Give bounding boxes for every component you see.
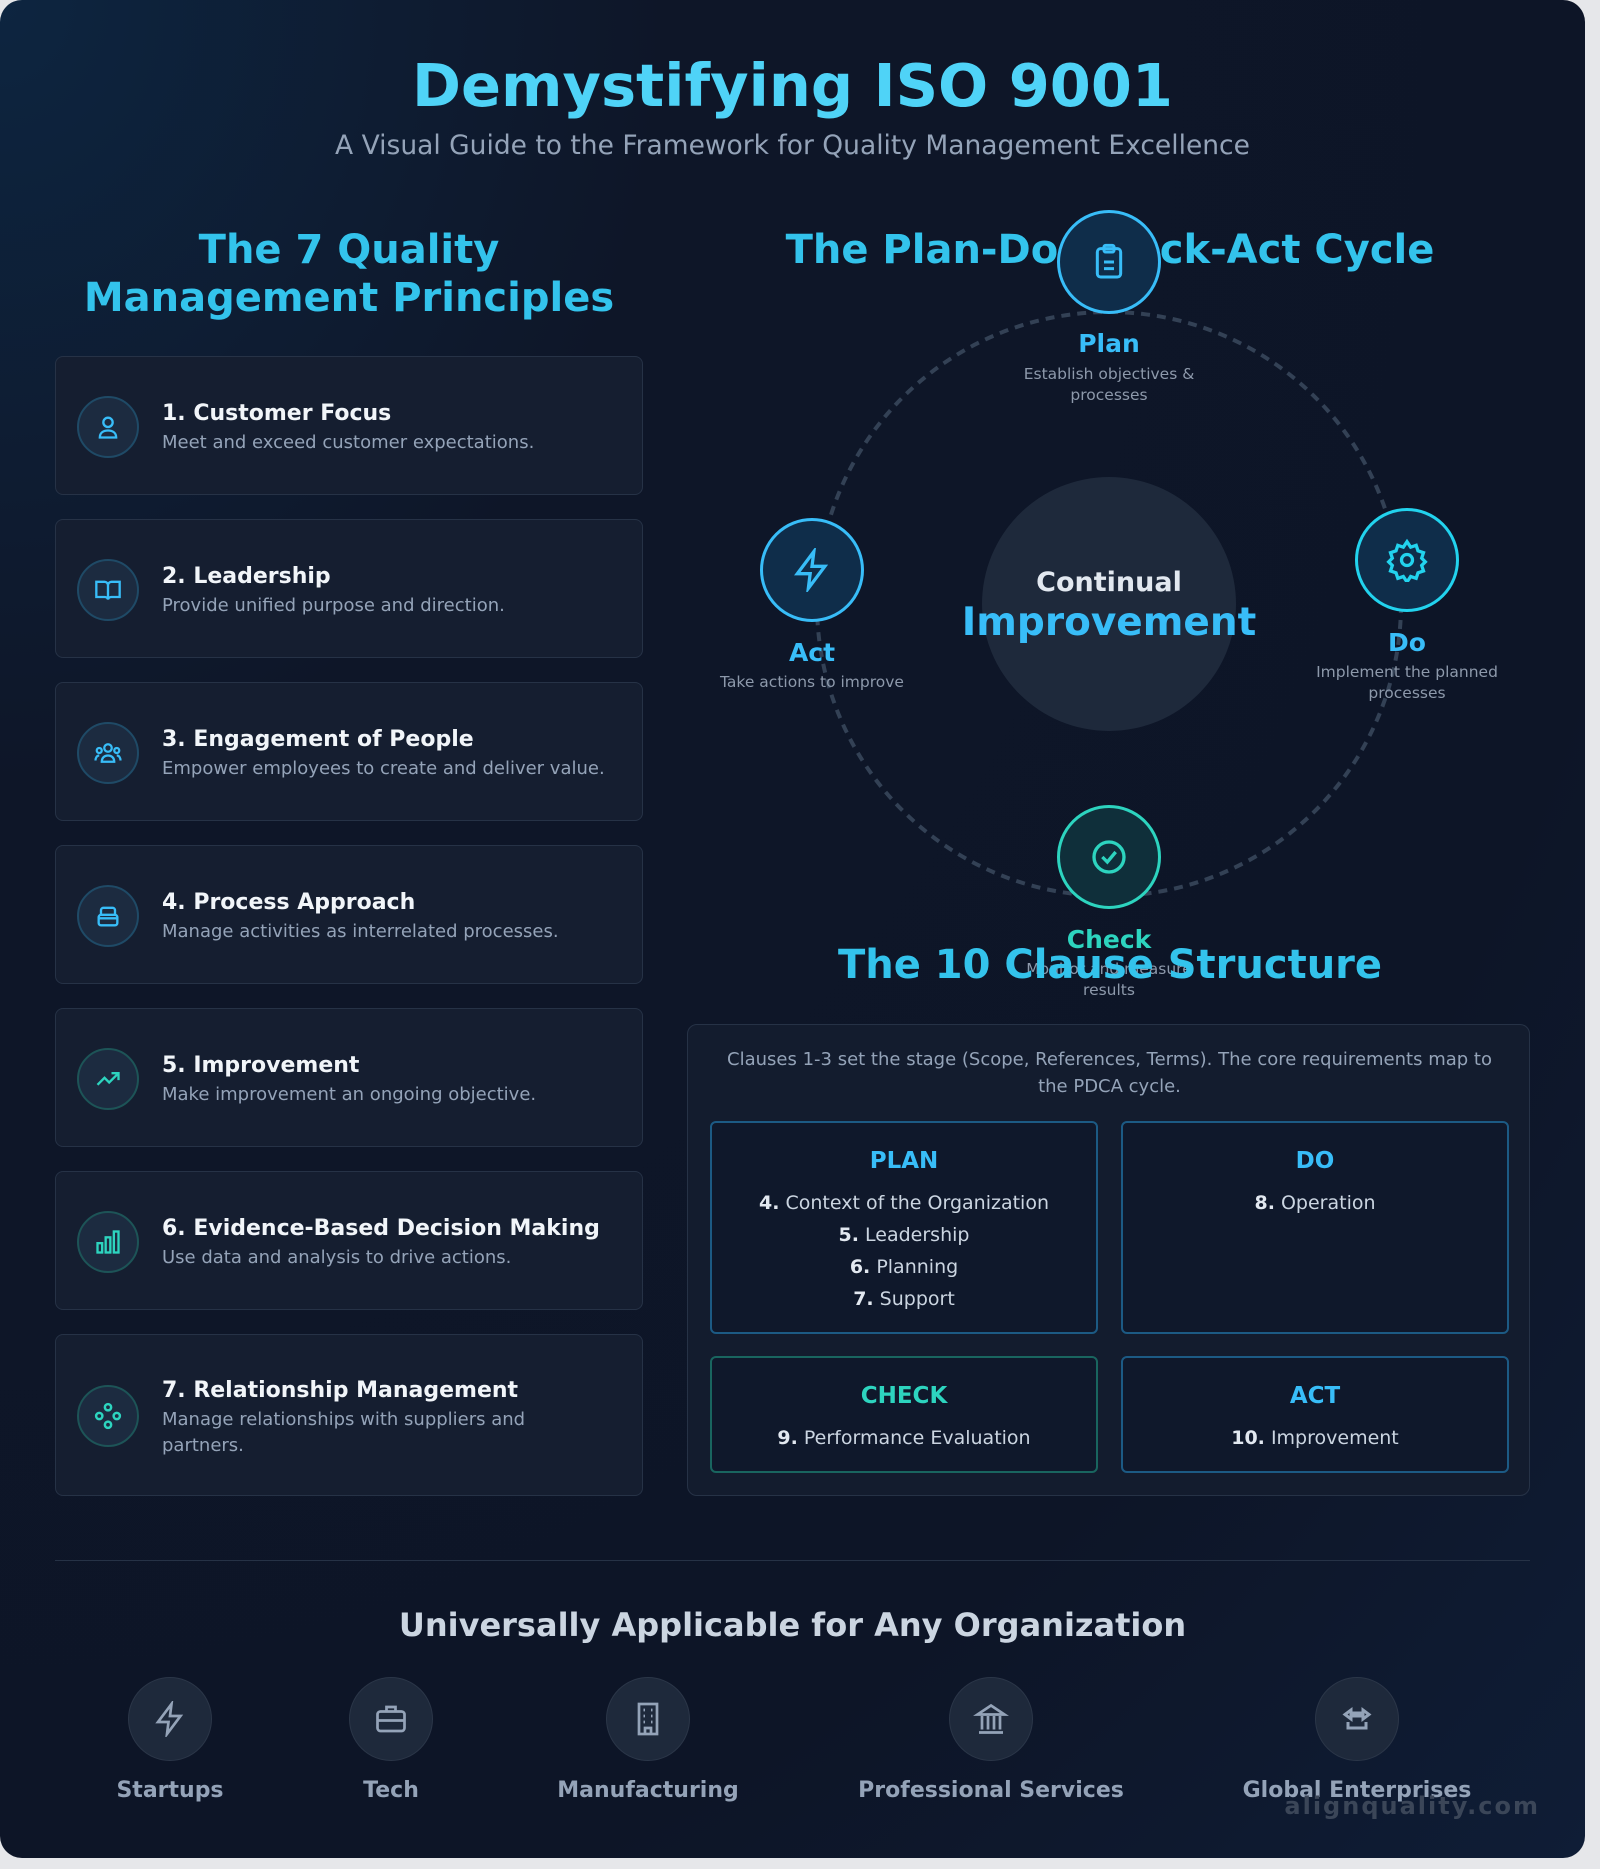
heading: 7 principles: Management Principles — [84, 275, 614, 321]
card: improvement: Make improvement an ongoing objective. — [162, 1084, 536, 1105]
heading: 7 principles: The 7 Quality — [199, 227, 499, 273]
card: evidence: Use data and analysis to drive actions. — [162, 1247, 511, 1268]
card: improvement: 5. Improvement — [162, 1053, 359, 1078]
chart: PDCA cycle: Improvement — [962, 600, 1256, 645]
card: relationship: 7. Relationship Management — [162, 1378, 518, 1403]
intro text: Clauses 1-3 set the stage (Scope, References, Terms). The core requirements map to the PDCA cycle. — [727, 1049, 1492, 1097]
icon: startups — [116, 1677, 224, 1803]
node: Check — [1057, 805, 1161, 909]
label: Do: Do — [1388, 628, 1426, 657]
icon: manufacturing — [557, 1677, 739, 1803]
card: engagement: 3. Engagement of People — [162, 727, 474, 752]
icon: tech — [349, 1677, 433, 1803]
icon: global enterprises — [1243, 1677, 1471, 1803]
box: DO: 8. Operation — [1254, 1192, 1376, 1214]
box: CHECK — [710, 1356, 1098, 1473]
title: Demystifying ISO 9001 — [412, 51, 1173, 120]
card: process — [55, 845, 643, 984]
box: DO — [1121, 1121, 1509, 1334]
box: DO: DO — [1296, 1148, 1334, 1174]
main card: processes — [1368, 684, 1446, 702]
icon: manufacturing: Manufacturing — [557, 1778, 739, 1803]
watermark: alignquality.com — [1284, 1792, 1540, 1820]
box: ACT: ACT — [1290, 1383, 1340, 1409]
icon: global enterprises: Global Enterprises — [1243, 1778, 1471, 1803]
label: Act: Act — [789, 638, 835, 667]
card: process: 4. Process Approach — [162, 890, 415, 915]
icon: tech: Tech — [363, 1778, 419, 1803]
box: PLAN: 4. Context of the Organization — [759, 1192, 1049, 1214]
box: PLAN: 7. Support — [853, 1288, 955, 1310]
card: leadership — [55, 519, 643, 658]
box: ACT — [1121, 1356, 1509, 1473]
heading: 10 clause: The 10 Clause Structure — [838, 942, 1382, 988]
heading: universally applicable: Universally Applicable for Any Organization — [399, 1606, 1186, 1644]
card: leadership: 2. Leadership — [162, 564, 331, 589]
panel: clauses — [687, 1024, 1530, 1496]
card: evidence: 6. Evidence-Based Decision Making — [162, 1216, 600, 1241]
card: improvement — [55, 1008, 643, 1147]
label: Plan: Plan — [1078, 329, 1140, 358]
chart: PDCA cycle — [816, 310, 1403, 896]
card: engagement: Empower employees to create and deliver value. — [162, 758, 605, 779]
box: PLAN: 6. Planning — [850, 1256, 958, 1278]
main card: processes — [1070, 386, 1148, 404]
card: engagement — [55, 682, 643, 821]
main card: Establish objectives & — [1024, 365, 1194, 383]
box: PLAN: PLAN — [870, 1148, 938, 1174]
node: Plan — [1057, 210, 1161, 314]
main card: Implement the planned — [1316, 663, 1498, 681]
card: process: Manage activities as interrelated processes. — [162, 921, 559, 942]
label: Check: Check — [1067, 925, 1151, 954]
box: PLAN — [710, 1121, 1098, 1334]
main card: Take actions to improve — [720, 673, 904, 691]
main card: Monitor and measure — [1026, 960, 1192, 978]
subtitle: A Visual Guide to the Framework for Quality Management Excellence — [335, 130, 1250, 161]
node: Do — [1355, 508, 1459, 612]
icon: startups: Startups — [116, 1778, 224, 1803]
card: relationship: Manage relationships with suppliers and partners. — [162, 1409, 525, 1456]
heading: 7 principles — [84, 227, 614, 321]
box: PLAN: 5. Leadership — [839, 1224, 969, 1246]
heading: PDCA: The Plan-Do-Check-Act Cycle — [786, 227, 1434, 273]
card: evidence — [55, 1171, 643, 1310]
card: customer focus: Meet and exceed customer expectations. — [162, 432, 534, 453]
card: relationship — [55, 1334, 643, 1496]
industries row — [116, 1677, 1471, 1803]
card: leadership: Provide unified purpose and direction. — [162, 595, 505, 616]
main card: results — [1083, 981, 1135, 999]
card: customer focus: 1. Customer Focus — [162, 401, 391, 426]
icon: professional services — [858, 1677, 1124, 1803]
icon: professional services: Professional Services — [858, 1778, 1124, 1803]
node: Act — [760, 518, 864, 622]
box: CHECK: 9. Performance Evaluation — [777, 1427, 1031, 1449]
box: CHECK: CHECK — [861, 1383, 947, 1409]
center text: Continual — [1036, 567, 1182, 598]
box: ACT: 10. Improvement — [1231, 1427, 1399, 1449]
card: customer focus — [55, 356, 643, 495]
